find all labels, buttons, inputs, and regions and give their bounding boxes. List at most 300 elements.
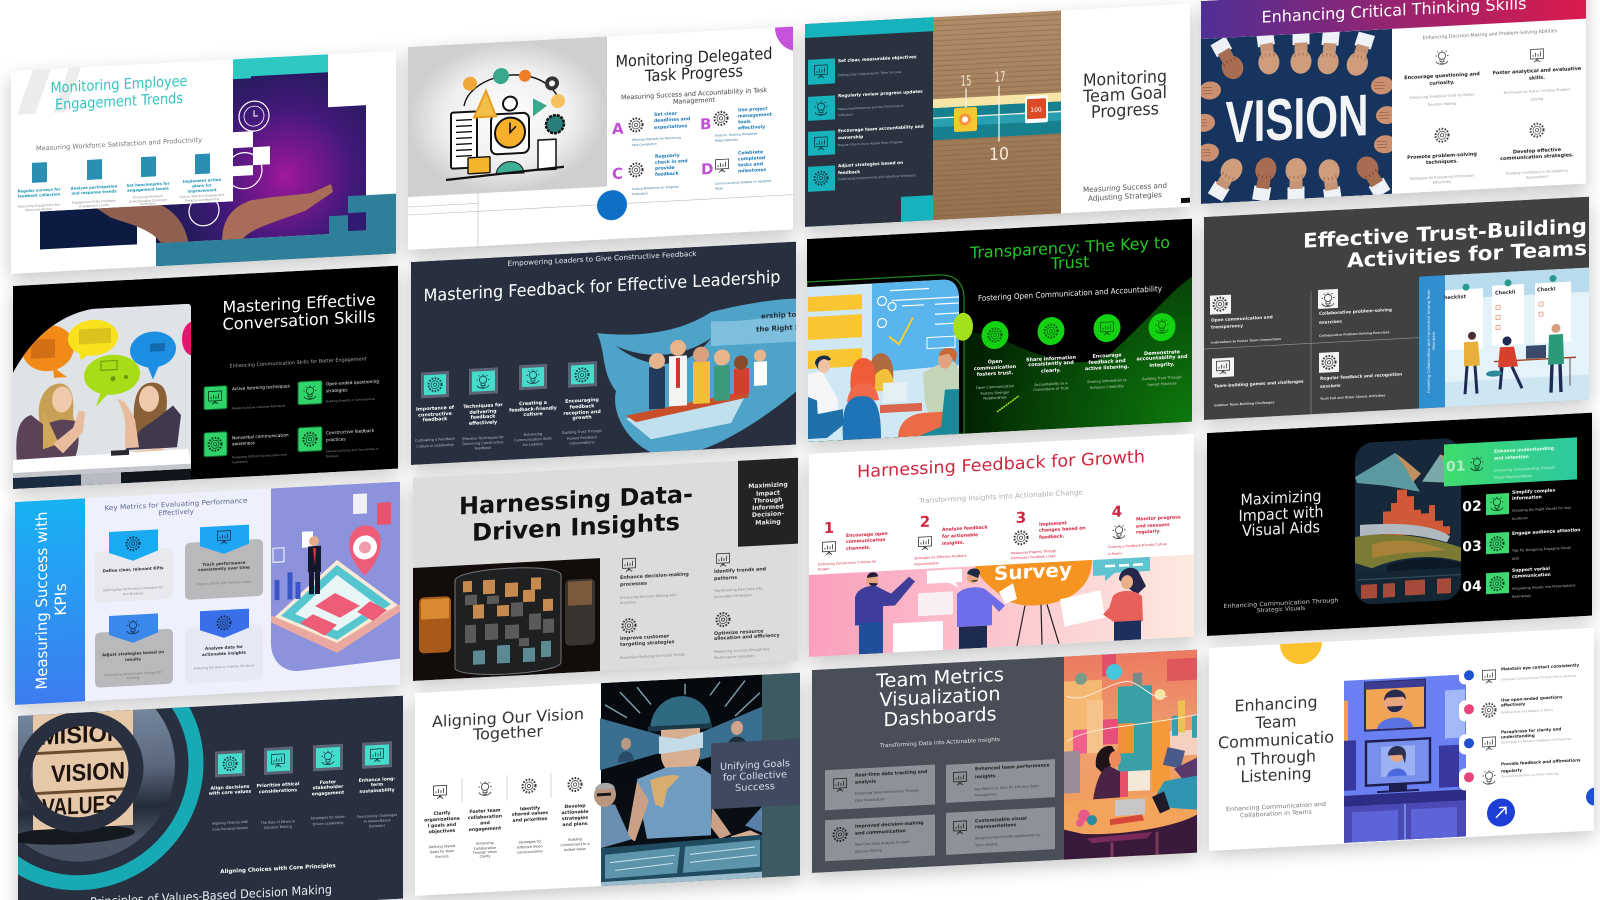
title: Activities for Teams — [1347, 236, 1587, 272]
image: two women and speech bubbles — [13, 276, 204, 489]
list text: effectively — [738, 124, 765, 132]
list icons — [630, 112, 728, 177]
icon tiles — [421, 361, 597, 398]
title: Team Goal — [1082, 83, 1167, 107]
title: Mastering Effective — [223, 290, 376, 317]
image: team at table with screen — [807, 274, 964, 442]
column captions: Honest Feedback — [567, 435, 598, 441]
subtitle: Enhancing Communication Skills for Better Engagement — [229, 356, 367, 370]
list captions: Techniques for Effective Feedback and Response — [1500, 737, 1571, 745]
list letters: A — [612, 120, 624, 138]
item captions: Sentiment — [140, 201, 157, 206]
list captions — [838, 69, 916, 181]
grid icons — [1436, 45, 1544, 142]
step headings: feedback. — [1039, 533, 1065, 541]
grid headings: Open communication and — [1211, 314, 1273, 324]
title: Monitoring — [1083, 67, 1167, 91]
title: Enhancing — [1234, 692, 1317, 716]
image: wood timeline: 15 — [960, 73, 971, 90]
list headings: Use open-ended questions — [1501, 694, 1563, 703]
column headings: and priorities — [513, 816, 548, 824]
title: Team — [1255, 711, 1296, 733]
list captions: Overcoming Barriers to Active Listening — [1501, 771, 1559, 779]
step headings: Analyze feedback — [942, 524, 988, 533]
title: Aligning Our Vision — [432, 705, 584, 731]
item captions: Audience — [1512, 516, 1528, 521]
image: woman with visor and holographic table — [594, 675, 762, 887]
grid headings: sessions — [1320, 383, 1341, 390]
column headings: feedback — [471, 413, 496, 421]
column headings: Align decisions — [210, 784, 250, 792]
item captions: Metrics to Monitor — [25, 207, 53, 212]
grid headings: Regular feedback and recognition — [1320, 372, 1402, 382]
dark side box: Maximizing — [748, 481, 788, 490]
grid headings: Team-building games and challenges — [1214, 379, 1304, 389]
column headings: feedback-friendly — [509, 405, 558, 414]
column captions: Enhancing — [476, 841, 494, 846]
step headings — [846, 514, 1181, 552]
column headings: feedback — [570, 403, 595, 411]
column captions: Building Trust Through — [1142, 375, 1182, 381]
item labels: Implement action — [183, 177, 221, 184]
image: clock and tasks illustration — [408, 36, 607, 197]
tile icons — [1214, 292, 1336, 375]
grid headings: Promote problem-solving — [1407, 151, 1477, 161]
item captions: Tracking and Reporting — [184, 197, 219, 203]
column captions — [976, 375, 1182, 401]
title: Communicatio — [1218, 727, 1334, 753]
list captions: Indicators — [838, 112, 853, 117]
list captions — [1500, 674, 1576, 779]
column headings: Open — [988, 359, 1003, 365]
item headings: Identify trends and — [714, 566, 767, 575]
column headings — [416, 397, 601, 430]
step headings: insights. — [942, 540, 965, 547]
column captions: Core Personal Values — [212, 826, 248, 832]
column headings: feedback — [423, 416, 448, 423]
image: wooden blocks in rings: MISION — [40, 719, 124, 751]
grid captions: Effectively — [1433, 180, 1451, 185]
step icons — [822, 524, 1126, 555]
image: team on ship swoosh: the Right Direction — [756, 322, 831, 334]
list text: tools — [738, 119, 751, 126]
image: data landscape — [1355, 438, 1461, 605]
item captions — [18, 194, 224, 212]
step captions: Continuous Feedback Loops — [1011, 554, 1056, 560]
card icons — [834, 772, 966, 841]
blue half circle — [1586, 787, 1600, 806]
column headings: strategies — [562, 815, 588, 822]
panel: Enhancing Critical Thinking Skills — [1193, 0, 1586, 211]
grid captions: Icebreakers to Foster Team Connections — [1211, 337, 1281, 345]
column captions: Cultivating a Feedback — [415, 437, 456, 443]
list captions: Celebrating Achievements and Adjusting Strategies — [838, 173, 916, 181]
card captions — [855, 782, 1041, 854]
panel heading: Effectively — [158, 508, 194, 517]
metric cards — [95, 539, 263, 689]
column captions: Enhancing — [524, 432, 542, 437]
step headings: for actionable — [942, 532, 978, 540]
grid captions: Assumptions — [1526, 175, 1548, 180]
column headings — [424, 803, 589, 836]
blue circle — [597, 189, 627, 221]
column captions: Enhance Credibility — [1090, 384, 1124, 390]
column captions: Effective Vision — [517, 844, 543, 850]
subtitle: Strategic Visuals — [1257, 606, 1305, 614]
list text — [654, 106, 773, 179]
title: Effective Trust-Building — [1303, 214, 1587, 253]
column captions: Communication — [517, 849, 543, 855]
item 01 highlighted: Visual Representation — [1494, 474, 1532, 480]
grid captions: Techniques to Foster Creative Problem — [1502, 87, 1571, 95]
column headings: Encouraging — [565, 397, 599, 405]
item captions: Measuring Success through Key — [714, 647, 770, 654]
column captions: Building Trust Through — [562, 429, 602, 435]
image: colourful analytics art — [1064, 650, 1197, 860]
step captions: Embracing Constructive Criticism for — [818, 559, 877, 567]
metric captions: Analyzing KPI Data to Improve Decisions — [194, 663, 255, 671]
item labels: improvement — [187, 187, 217, 194]
list text: Set clear — [654, 111, 678, 118]
image: team with checklists — [1444, 268, 1589, 407]
metric headings: consistently over time — [198, 565, 250, 572]
grid captions: Outdoor Team-Building Challenges — [1214, 400, 1274, 407]
image: wood timeline: 10 — [989, 144, 1009, 165]
column headings: shared values — [512, 810, 548, 818]
panel: Maximizing Impact with Visual Aids — [1207, 413, 1592, 636]
green icons — [204, 381, 322, 457]
panel: Team Metrics Visualization Dashboards — [812, 650, 1197, 873]
title: Conversation Skills — [223, 307, 376, 334]
caption box: for Collective — [723, 769, 787, 784]
list captions: Enhanced Communication Through Active Listening — [1501, 674, 1576, 682]
list captions: Communicating Updates on Assigned — [715, 179, 771, 186]
column captions: Cornerstone of Trust — [1033, 386, 1069, 392]
list headings: effectively — [1501, 701, 1525, 708]
list captions: Mastering Active Listening Techniques — [232, 404, 286, 410]
item headings: information — [1512, 494, 1542, 502]
column headings: term — [371, 782, 383, 788]
item labels: feedback collection — [18, 191, 61, 199]
item labels: Set benchmarks for — [126, 181, 170, 188]
metric cards — [825, 758, 1055, 861]
column headings: objectives — [429, 828, 455, 835]
column headings: accountability and — [1136, 354, 1188, 363]
image: wooden blocks in rings — [0, 651, 196, 889]
list headings — [1501, 662, 1581, 774]
grid headings: curiosity. — [1429, 80, 1455, 87]
item captions: Analyzing Feedback — [133, 194, 163, 200]
list letters: C — [612, 165, 623, 183]
title: Mastering Feedback for Effective Leadership — [423, 267, 780, 306]
grid headings: Collaborative problem-solving — [1319, 307, 1392, 317]
closing line: Aligning Choices with Core Principles — [220, 863, 336, 875]
item icons — [622, 553, 730, 632]
column captions: Honest Practices — [1147, 381, 1177, 387]
grid captions: Solving — [1531, 97, 1543, 102]
item captions: Tips for Designing Engaging Visual — [1511, 546, 1571, 553]
metric headings: Analyze data for — [205, 644, 243, 651]
list text: check in and — [655, 158, 688, 166]
item headings: Simplify complex — [1512, 488, 1555, 496]
metric captions — [103, 579, 255, 681]
caption box: Success — [735, 781, 775, 794]
card captions: Real-Time Data Analysis for Agile — [855, 840, 909, 847]
metric captions: Tracking — [126, 675, 139, 680]
subtitle: Transforming Insights into Actionable Change — [918, 488, 1083, 505]
column captions: Accountability as a — [1034, 381, 1068, 387]
column headings: engagement — [469, 825, 502, 833]
column captions: Driven Leadership — [313, 821, 343, 826]
grid captions — [1410, 87, 1571, 186]
panel: Transparency The Key to Trust — [807, 219, 1192, 442]
column headings: Foster — [320, 779, 337, 786]
column icons and dividers — [434, 771, 582, 804]
number labels: 04 — [1462, 578, 1482, 595]
image: wood timeline — [933, 10, 1061, 220]
white icon tiles — [1210, 289, 1339, 379]
list headings: feedback — [838, 169, 860, 176]
step captions: Growth — [818, 567, 830, 572]
column headings: active listening. — [1085, 364, 1129, 372]
item captions: Aids — [1512, 556, 1519, 561]
list text: Celebrate — [738, 149, 763, 157]
list captions: Tasks — [714, 186, 723, 191]
quote marks — [17, 67, 81, 115]
blue side bar — [15, 498, 85, 705]
white text panel — [40, 201, 233, 212]
card captions: Data Visualization — [855, 797, 885, 803]
column captions: Unified Vision — [564, 847, 586, 852]
list captions: Enhancing Clarity and Conciseness in — [326, 447, 379, 453]
column headings: Demonstrate — [1144, 349, 1181, 357]
list headings: understanding — [1501, 733, 1535, 740]
list headings: ownership — [838, 134, 863, 141]
title: Measuring Success with — [33, 511, 51, 690]
step headings: communication — [846, 537, 886, 545]
grid captions — [1211, 330, 1390, 408]
yellow circle — [1280, 621, 1322, 665]
icon glyphs — [208, 385, 316, 451]
list text: provide — [655, 165, 675, 172]
item captions — [620, 586, 770, 665]
column captions: Strategies for Value- — [311, 815, 346, 820]
grid captions: Trust Fall and Other Classic Activities — [1320, 393, 1385, 401]
column headings: delivering — [469, 408, 497, 416]
column headings: integrity. — [1149, 362, 1175, 369]
list captions: Task Completion — [631, 142, 657, 147]
image: VISION with fists — [1201, 29, 1392, 204]
column headings: communication — [974, 364, 1017, 372]
title: Harnessing Feedback for Growth — [857, 447, 1145, 482]
list captions: Setting Milestones for Progress — [632, 185, 679, 191]
list headings: Regularly review progress updates — [838, 89, 923, 99]
panel: Monitoring Delegated Task Progress — [408, 26, 793, 250]
column headings: Encourage — [1092, 352, 1122, 360]
list headings: Set clear, measurable objectives — [838, 54, 917, 64]
column captions: Strategies for — [519, 839, 542, 844]
column captions: The Role of Ethics in — [260, 819, 295, 825]
column headings: Enhance long- — [359, 776, 395, 784]
dark side box — [738, 458, 798, 547]
teal accents — [805, 17, 934, 227]
image: team on ship swoosh: ership to — [761, 311, 797, 320]
card captions: Decision Making — [855, 848, 882, 854]
column captions: Decision Making — [264, 824, 292, 830]
icon tiles — [215, 741, 392, 778]
list text: management — [738, 112, 773, 120]
column headings: collaboration — [468, 813, 502, 821]
lime squiggle — [997, 396, 1019, 412]
step numbers: 3 — [1016, 508, 1026, 527]
panel: Monitoring Employee Engagement Trends — [11, 51, 396, 274]
column headings: l goals and — [428, 822, 456, 829]
card captions: Management — [975, 792, 997, 797]
step headings: changes based on — [1039, 525, 1086, 534]
panel: Mastering Feedback for Effective Leadership — [411, 240, 831, 465]
list captions — [232, 397, 379, 464]
column captions: Fosters Stronger — [981, 390, 1010, 396]
item headings: Enhance decision-making — [620, 571, 689, 581]
title: Harnessing Data- — [459, 480, 693, 521]
column captions: Sharing Information to — [1087, 378, 1127, 384]
column headings: clearly. — [1041, 368, 1061, 375]
list text: Open-ended questioning — [326, 379, 379, 387]
column captions: in Values-Based — [364, 818, 390, 824]
grid captions: Collaborative Problem-Solving Exercises — [1319, 330, 1390, 338]
step headings: regularly. — [1136, 528, 1161, 536]
subtitle: Enhancing Communication and — [1226, 802, 1326, 813]
grid headings: Foster analytical and evaluative — [1493, 66, 1582, 77]
metric headings: results — [125, 656, 142, 662]
column headings: sustainability — [359, 787, 395, 795]
title: Trust — [1050, 252, 1089, 273]
metric headings: Define clear, relevant KPIs — [103, 565, 164, 573]
item labels: Analyze participation — [71, 183, 118, 191]
list text: Regularly — [655, 153, 680, 160]
list captions: Regular Check-ins to Assess Team Progress — [838, 140, 903, 147]
step captions — [818, 542, 1167, 572]
image: video call illustration — [1344, 674, 1466, 843]
metric tags — [109, 525, 249, 644]
list letters — [612, 118, 713, 179]
subtitle: Enhancing Decision-Making and Problem-Solving Abilities — [1423, 28, 1558, 41]
panel: Enhancing Team Communication Through Listening — [1209, 606, 1600, 851]
subtitle: Measuring Success and — [1083, 181, 1167, 194]
list headings: regularly — [1501, 767, 1522, 774]
list captions: Navigating Difficult Conversations with — [232, 452, 287, 459]
list captions: Setting Clear Objectives for Team Success — [838, 70, 902, 77]
list captions: Responsibilities — [715, 137, 739, 143]
subtitle: Collaboration in Teams — [1240, 810, 1312, 819]
title: Dashboards — [884, 703, 997, 731]
list text: Nonverbal communication — [232, 432, 289, 441]
icon row — [32, 153, 210, 183]
item captions: Transforming Raw Data into — [713, 586, 763, 593]
title: Together — [472, 722, 544, 744]
panel: Measuring Success with KPIs — [15, 482, 400, 705]
dark side box: Making — [755, 519, 781, 527]
list captions: Building Trust and Rapport in Teams — [1501, 708, 1553, 715]
list captions: Dialogue — [326, 454, 339, 458]
column captions: Culture in Leadership — [416, 443, 454, 449]
list captions: Tools for Tracking Delegated — [714, 131, 757, 138]
item headings — [620, 566, 781, 648]
list text: practices — [326, 436, 346, 443]
caption box — [711, 739, 800, 809]
item headings: Optimize resource — [714, 628, 764, 637]
title: Visualization — [880, 683, 1001, 711]
card captions: Designing User-Friendly Dashboards for — [975, 833, 1041, 840]
item captions: Predictive Modeling for Future Trends — [620, 653, 685, 660]
card headings: Enhanced team performance — [975, 762, 1050, 772]
decorative circle — [775, 26, 793, 51]
subtitle: Measuring Success and Accountability in Task — [621, 86, 767, 102]
grid headings: Develop effective — [1513, 147, 1562, 155]
item captions: Analytics — [620, 600, 636, 605]
list captions — [631, 131, 771, 196]
image: team on ship swoosh — [597, 297, 831, 455]
panel: Mastering Effective Conversation Skills — [13, 266, 398, 489]
title: Monitoring Employee — [51, 73, 188, 97]
arrow button — [1487, 798, 1515, 827]
list letters: B — [700, 115, 711, 134]
subtitle: Enhancing Communication Through — [1223, 598, 1339, 610]
column captions: Aligning Choices with — [212, 820, 248, 826]
step headings: Encourage open — [846, 531, 888, 539]
item headings: Engage audience attention — [1512, 527, 1580, 537]
column captions: Success — [435, 854, 449, 859]
item headings: targeting strategies — [620, 639, 675, 648]
list text: milestones — [738, 167, 767, 175]
column headings: culture — [523, 411, 543, 418]
column headings: consistently and — [1028, 360, 1074, 368]
item 01 highlighted: and retention — [1494, 454, 1529, 462]
item 01 highlighted — [1444, 437, 1577, 486]
dark side box: Impact — [756, 490, 780, 498]
grid captions: Decision Making — [1428, 101, 1456, 107]
column headings: Share information — [1026, 355, 1077, 363]
title: Task Progress — [644, 61, 743, 85]
list headings: Maintain eye contact consistently — [1501, 662, 1579, 672]
list text: awareness — [232, 440, 256, 447]
vertical blue label — [1419, 275, 1445, 409]
title: Visual Aids — [1242, 518, 1320, 540]
item captions: Engagement Pulse Employee — [72, 198, 116, 205]
step numbers: 1 — [824, 519, 834, 537]
metric headings: Adjust strategies based on — [102, 649, 164, 657]
image: wooden blocks in rings: VALUES — [42, 791, 118, 822]
list letters: D — [701, 160, 713, 178]
image: survey illustration: Survey — [994, 559, 1073, 585]
panel: Harnessing Feedback for Growth — [809, 434, 1194, 657]
item labels: plans for — [192, 182, 212, 188]
metric headings: actionable insights — [202, 650, 247, 657]
item headings: processes — [620, 581, 647, 588]
list captions: Confidence — [232, 460, 248, 464]
metric headings: Track performance — [202, 560, 246, 567]
item captions: Understanding Employee — [129, 198, 167, 204]
column headings: engagement — [312, 790, 345, 797]
item captions: Choosing the Right Visuals for Your — [1512, 506, 1572, 513]
image: team with checklists: Checkl — [1537, 286, 1556, 293]
item headings: allocation and efficiency — [714, 633, 781, 642]
column headings: Clarify — [434, 810, 450, 817]
grid headings: communication strategies. — [1500, 152, 1574, 162]
list headings — [838, 54, 924, 176]
list text: strategies — [326, 387, 348, 394]
title: Engagement Trends — [55, 90, 183, 114]
